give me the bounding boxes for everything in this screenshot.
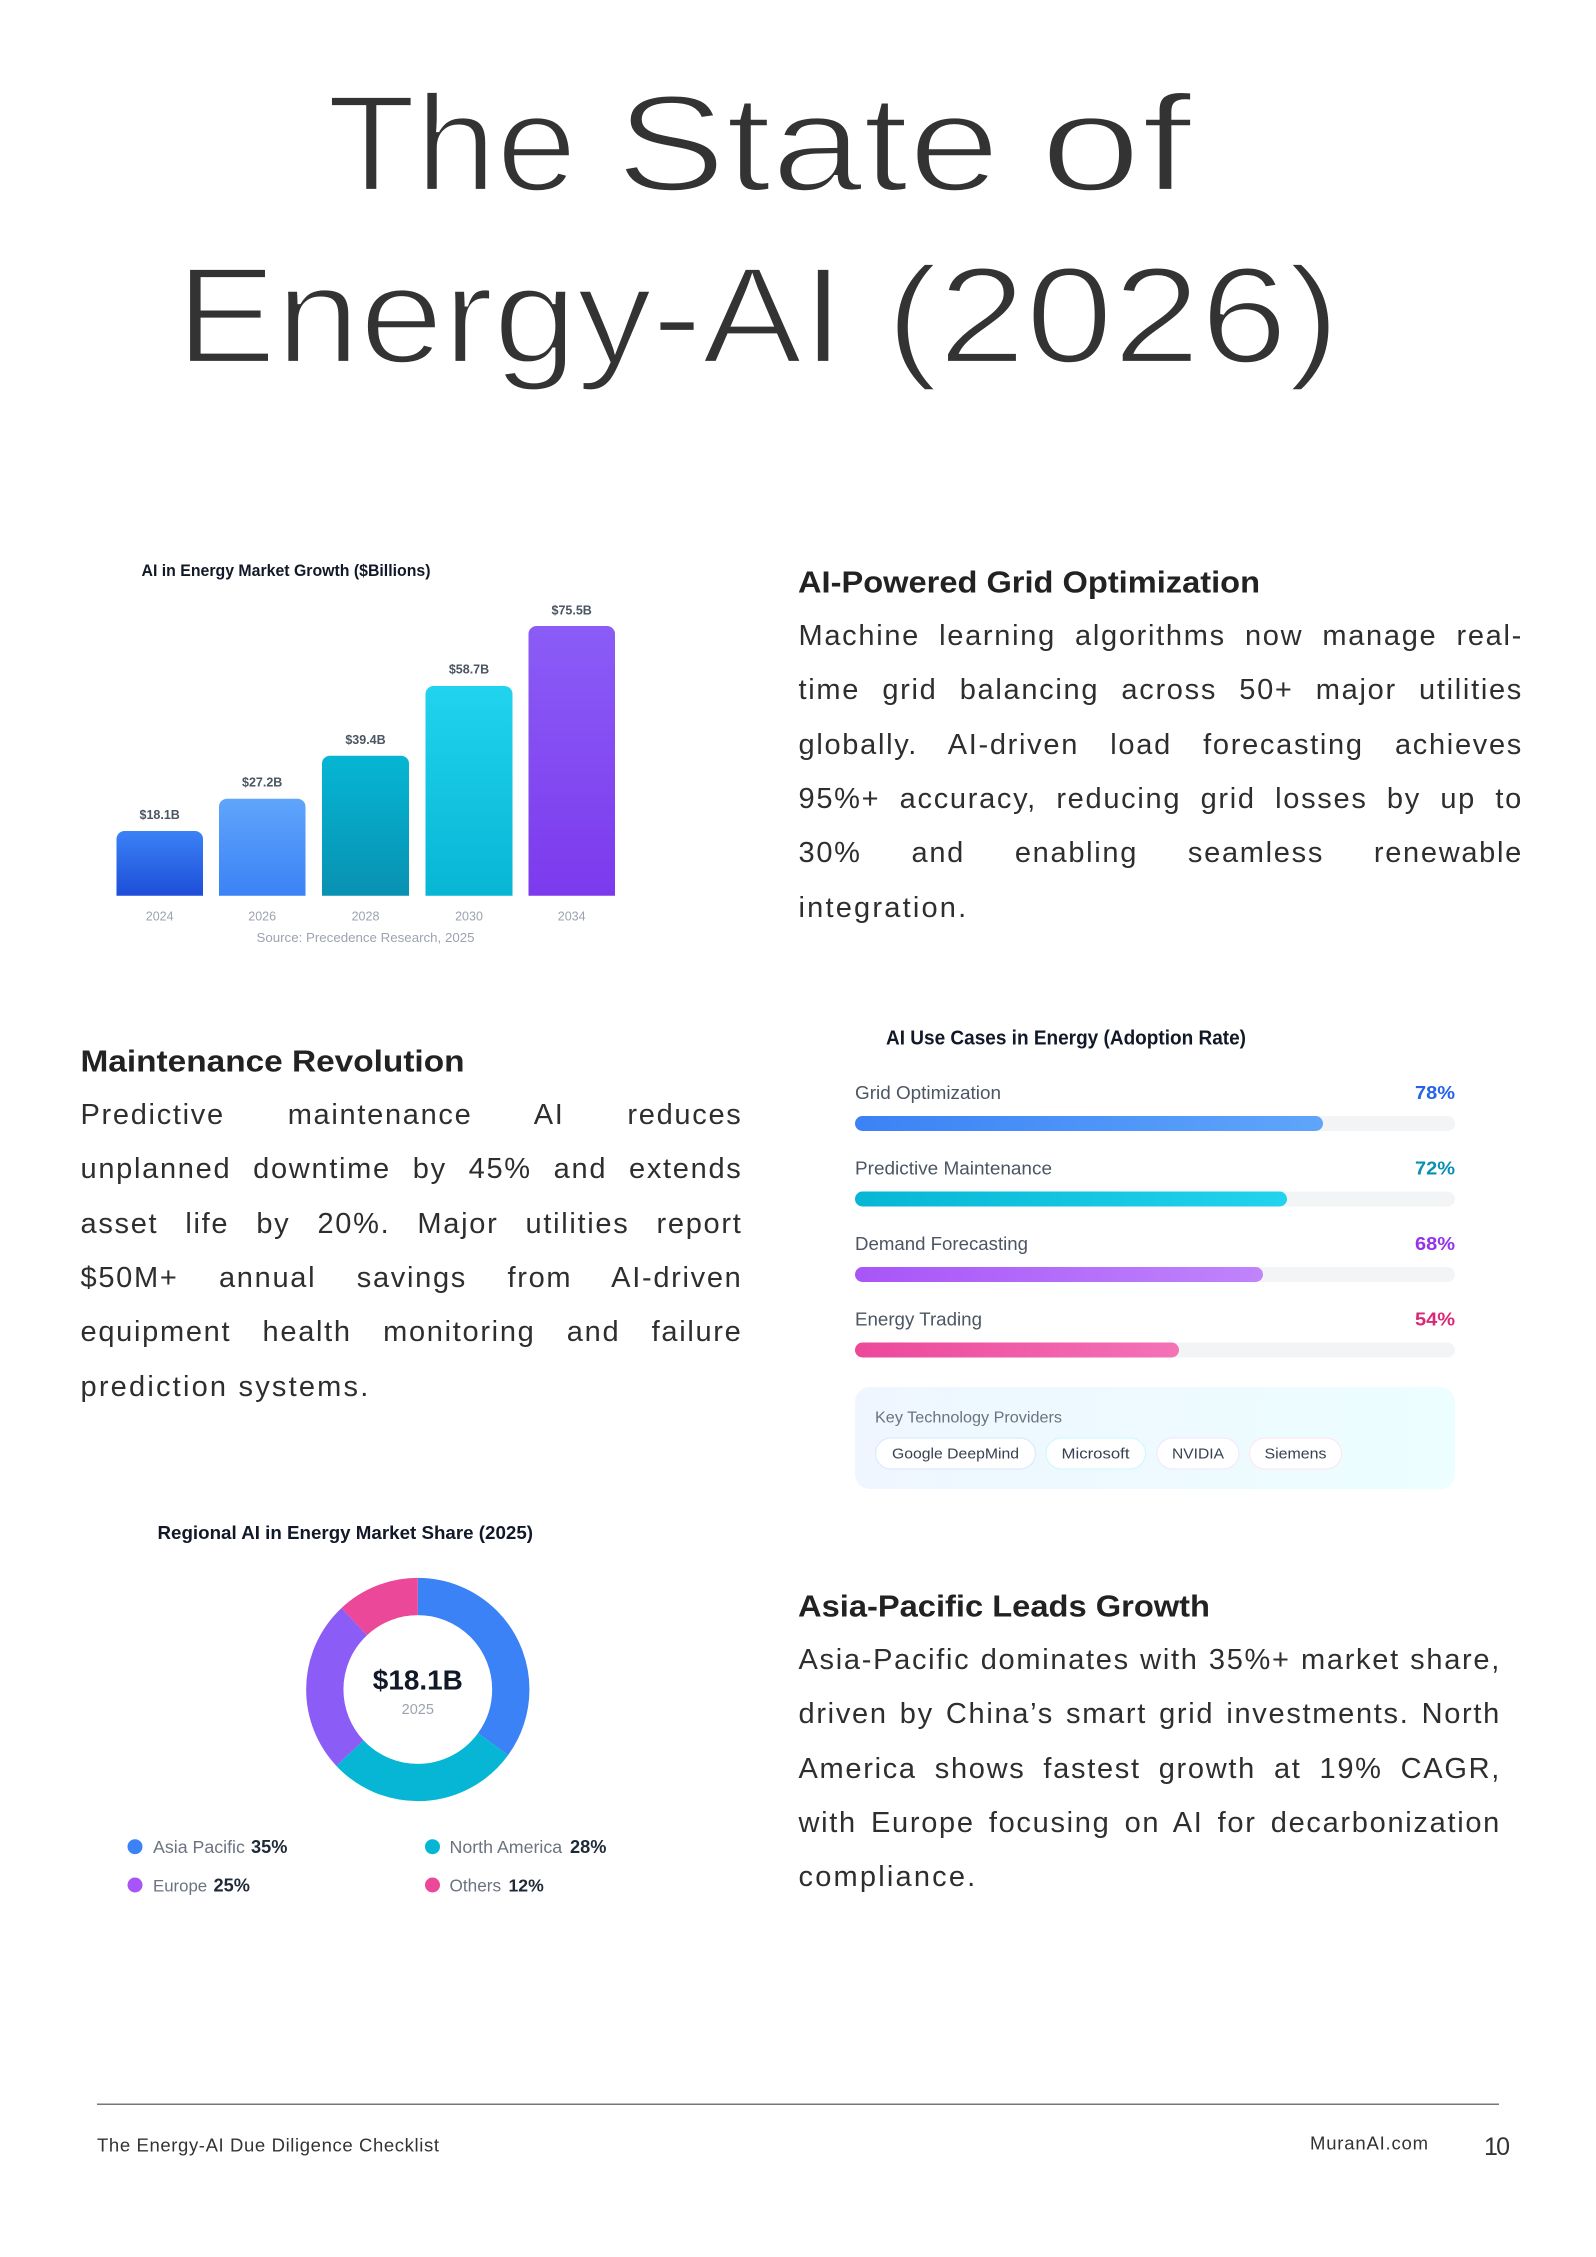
text block: regional growth: Asia-Pacific dominates with 35%+ market share, — [798, 1644, 1501, 1676]
text block: grid optimization: Machine learning algorithms now manage real- — [798, 620, 1523, 652]
bar chart: AI use cases adoption — [855, 1028, 1455, 1489]
legend: North America — [425, 1837, 606, 1857]
legend: Others — [425, 1875, 544, 1895]
heading: AI-Powered Grid Optimization: AI-Powered Grid Optimization — [798, 564, 1260, 599]
donut ring — [325, 1596, 511, 1782]
pill: Google DeepMind — [876, 1438, 1036, 1469]
text block: regional growth: driven by China’s smart grid investments. North — [798, 1698, 1501, 1730]
donut chart: regional market share — [128, 1523, 606, 1895]
text block: grid optimization: 95%+ accuracy, reducing grid losses by up to — [798, 783, 1523, 815]
pill: Siemens — [1250, 1438, 1342, 1469]
year labels: 2028 — [352, 910, 379, 924]
value labels — [140, 604, 592, 822]
title: The — [327, 68, 577, 220]
row: Energy Trading — [855, 1310, 1455, 1358]
row: Predictive Maintenance: Predictive Maintenance — [855, 1158, 1052, 1178]
text block: maintenance: $50M+ annual savings from AI-driven — [80, 1262, 742, 1294]
legend: Europe: 25% — [214, 1875, 250, 1895]
year labels: 2030 — [455, 910, 483, 924]
text block: grid optimization: integration. — [798, 892, 968, 924]
row: Grid Optimization: 78% — [1415, 1083, 1455, 1103]
footer: website: MuranAI.com — [1310, 2132, 1428, 2154]
text block: grid optimization: time grid balancing across 50+ major utilities — [798, 674, 1523, 706]
year labels: 2026 — [248, 910, 276, 924]
text block: maintenance: equipment health monitoring and failure — [80, 1316, 742, 1348]
footer — [97, 2104, 1510, 2161]
text block: grid optimization: globally. AI-driven load forecasting achieves — [798, 729, 1523, 761]
value labels: $39.4B — [345, 733, 386, 747]
legend: North America: North America — [450, 1837, 562, 1857]
value labels: $75.5B — [552, 604, 592, 618]
value labels: $18.1B — [140, 808, 180, 822]
text block: grid optimization: 30% and enabling seamless renewable — [798, 837, 1523, 869]
title: (2026) — [886, 240, 1340, 392]
pill: Microsoft: Microsoft — [1062, 1446, 1130, 1462]
heading: Asia-Pacific Leads Growth: Asia-Pacific Leads Growth — [798, 1589, 1210, 1624]
bars — [116, 626, 615, 896]
year labels: 2024 — [146, 910, 174, 924]
pill: Microsoft — [1046, 1438, 1146, 1469]
panel: key technology providers: Key Technology Providers — [875, 1410, 1062, 1426]
row: Energy Trading: 54% — [1415, 1310, 1455, 1330]
chart title: AI Use Cases in Energy (Adoption Rate) — [886, 1028, 1246, 1050]
legend — [128, 1837, 606, 1895]
row: Predictive Maintenance: 72% — [1415, 1158, 1455, 1178]
panel: key technology providers — [855, 1387, 1455, 1489]
legend: Asia Pacific: Asia Pacific — [153, 1837, 245, 1857]
chart title: Regional AI in Energy Market Share (2025) — [158, 1523, 533, 1543]
text block: regional growth: America shows fastest growth at 19% CAGR, — [798, 1753, 1501, 1785]
text block: regional growth: compliance. — [798, 1861, 977, 1893]
legend: Others: 12% — [508, 1875, 544, 1895]
title — [176, 68, 1340, 392]
text block: maintenance: unplanned downtime by 45% and extends — [80, 1153, 742, 1185]
title: State — [616, 68, 1000, 220]
text block: regional growth — [798, 1644, 1501, 1893]
donut centre value: $18.1B — [373, 1664, 463, 1696]
text block: maintenance: prediction systems. — [80, 1371, 370, 1403]
legend: Asia Pacific: 35% — [251, 1837, 287, 1857]
source note: Source: Precedence Research, 2025 — [256, 930, 475, 945]
row: Demand Forecasting: Demand Forecasting — [855, 1234, 1028, 1254]
text block: maintenance: asset life by 20%. Major utilities report — [80, 1208, 742, 1240]
title: Energy-AI — [176, 240, 844, 392]
bar chart: AI in Energy Market Growth — [116, 562, 615, 945]
row: Demand Forecasting: 68% — [1415, 1234, 1455, 1254]
year labels: 2034 — [558, 910, 586, 924]
row: Grid Optimization: Grid Optimization — [855, 1083, 1001, 1103]
text block: grid optimization — [798, 620, 1523, 924]
row: Demand Forecasting — [855, 1234, 1455, 1282]
legend: Others: Others — [450, 1875, 501, 1895]
legend: Europe: Europe — [153, 1876, 207, 1895]
pill: NVIDIA: NVIDIA — [1172, 1446, 1224, 1462]
pill: NVIDIA — [1157, 1438, 1239, 1469]
row: Energy Trading: Energy Trading — [855, 1310, 982, 1330]
value labels: $58.7B — [449, 662, 489, 676]
year labels — [146, 910, 586, 924]
pill: Google DeepMind: Google DeepMind — [892, 1446, 1019, 1462]
legend: Europe — [128, 1875, 250, 1895]
title: of — [1040, 68, 1193, 220]
heading: Maintenance Revolution: Maintenance Revolution — [80, 1044, 464, 1079]
footer: page number: 10 — [1484, 2133, 1510, 2161]
text block: regional growth: with Europe focusing on AI for decarbonization — [798, 1807, 1501, 1839]
donut centre year: 2025 — [402, 1702, 434, 1718]
legend: North America: 28% — [570, 1837, 606, 1857]
pill: Siemens: Siemens — [1264, 1446, 1326, 1462]
text block: maintenance — [80, 1099, 742, 1403]
footer: document title: The Energy-AI Due Diligence Checklist — [97, 2134, 439, 2156]
chart title: AI in Energy Market Growth ($Billions) — [142, 562, 430, 580]
row: Grid Optimization — [855, 1083, 1455, 1131]
legend: Asia Pacific — [128, 1837, 287, 1857]
row: Predictive Maintenance — [855, 1158, 1455, 1206]
text block: maintenance: Predictive maintenance AI reduces — [80, 1099, 742, 1131]
value labels: $27.2B — [242, 776, 282, 790]
